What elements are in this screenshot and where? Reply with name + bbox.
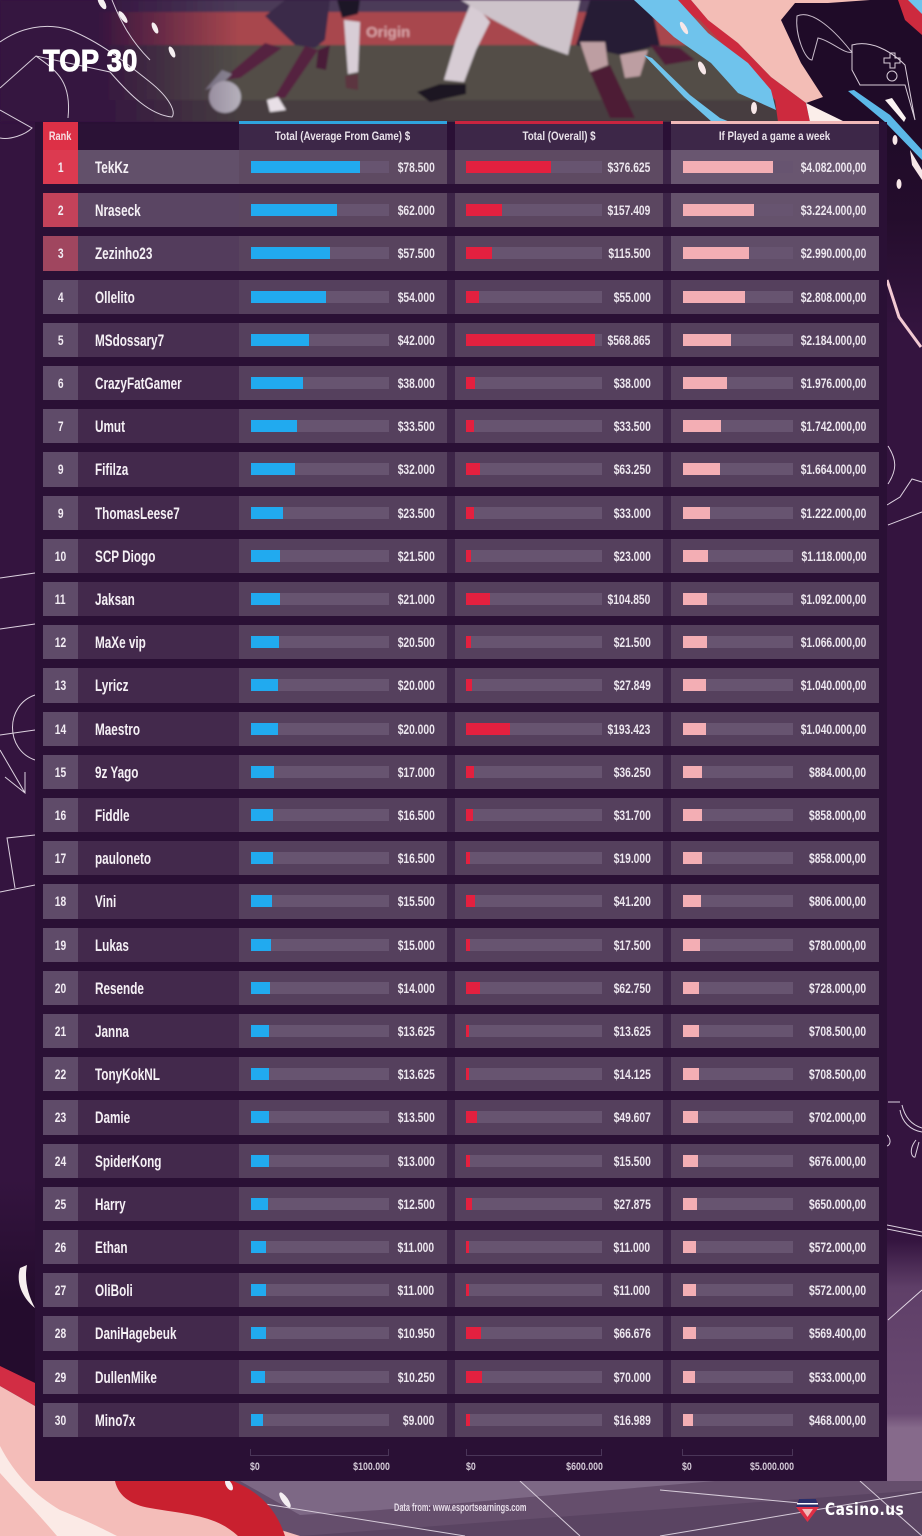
row 22: TonyKokNL	[95, 1065, 160, 1084]
row 12: MaXe vip	[95, 633, 146, 652]
row 6: CrazyFatGamer	[95, 374, 182, 393]
source note: Data from: www.esportsearnings.com	[394, 1502, 526, 1514]
row 20: $62.750	[613, 981, 650, 996]
row 20: $14.000	[397, 981, 434, 996]
row 7: 7	[58, 419, 63, 434]
row 27	[43, 1273, 879, 1307]
row 29: $70.000	[613, 1370, 650, 1385]
row 29: DullenMike	[95, 1368, 157, 1387]
header: total overall: Total (Overall) $	[522, 131, 596, 143]
header: rank	[43, 122, 78, 150]
row 1: TekKz	[95, 158, 129, 177]
row 1	[43, 150, 879, 184]
row 21	[43, 1014, 879, 1048]
row 19: 19	[55, 938, 66, 953]
row 4: $55.000	[613, 290, 650, 305]
row 25: $12.500	[397, 1197, 434, 1212]
row 29: $533.000,00	[809, 1370, 866, 1385]
axis label: $0: $0	[466, 1461, 476, 1473]
row 5	[43, 323, 879, 357]
row 14	[43, 712, 879, 746]
row 17	[43, 841, 879, 875]
row 22: $14.125	[613, 1067, 650, 1082]
row 9: $1.222.000,00	[801, 506, 866, 521]
row 8: 9	[58, 462, 63, 477]
row 19: Lukas	[95, 936, 129, 955]
row 27: $11.000	[398, 1283, 434, 1298]
row 15	[43, 755, 879, 789]
icon: shield	[796, 1499, 819, 1522]
row 5: MSdossary7	[95, 331, 164, 350]
row 10: $1.118.000,00	[801, 549, 866, 564]
row 20: Resende	[95, 979, 144, 998]
row 3: $57.500	[397, 246, 434, 261]
row 5: $568.865	[608, 333, 650, 348]
row 10: 10	[55, 549, 66, 564]
title: TOP 30	[43, 43, 138, 78]
header: played a game a week	[671, 124, 879, 150]
header: total overall	[455, 124, 663, 150]
row 18: $15.500	[397, 894, 434, 909]
row 27: $11.000	[614, 1283, 650, 1298]
row 24: $676.000,00	[809, 1154, 866, 1169]
row 6: 6	[58, 376, 63, 391]
row 19: $17.500	[613, 938, 650, 953]
axis label: $5.000.000: $5.000.000	[750, 1461, 794, 1473]
row 28: $10.950	[397, 1326, 434, 1341]
row 13: $27.849	[613, 678, 650, 693]
row 9: $33.000	[613, 506, 650, 521]
row 13	[43, 668, 879, 703]
row 6: $38.000	[613, 376, 650, 391]
row 23	[43, 1100, 879, 1135]
row 14: $1.040.000,00	[801, 722, 866, 737]
row 11: $21.000	[397, 592, 434, 607]
row 28: $66.676	[613, 1326, 650, 1341]
axis label: $600.000: $600.000	[566, 1461, 603, 1473]
row 18: $806.000,00	[809, 894, 866, 909]
row 24: $15.500	[613, 1154, 650, 1169]
row 26	[43, 1230, 879, 1264]
row 8: $63.250	[613, 462, 650, 477]
row 15: 15	[55, 765, 66, 780]
row 18	[43, 884, 879, 919]
row 10: SCP Diogo	[95, 547, 155, 566]
row 23: $49.607	[613, 1110, 650, 1125]
row 3	[43, 236, 879, 271]
row 1: $376.625	[608, 160, 650, 175]
row 17: pauloneto	[95, 849, 151, 868]
header: played a game a week: If Played a game a week	[719, 131, 831, 143]
row 7: Umut	[95, 417, 125, 436]
row 28: 28	[55, 1326, 66, 1341]
axis: played a game a week	[682, 1449, 793, 1456]
row 7	[43, 409, 879, 443]
row 9: 9	[58, 506, 63, 521]
logo: Casino.us	[796, 1499, 904, 1522]
row 25: Harry	[95, 1195, 126, 1214]
row 2: $62.000	[397, 203, 434, 218]
row 10: $21.500	[397, 549, 434, 564]
row 16: $858.000,00	[809, 808, 866, 823]
row 23: Damie	[95, 1108, 130, 1127]
row 3: $2.990.000,00	[801, 246, 866, 261]
row 9: ThomasLeese7	[95, 504, 180, 523]
row 21: $13.625	[397, 1024, 434, 1039]
row 7: $33.500	[613, 419, 650, 434]
row 17: $858.000,00	[809, 851, 866, 866]
row 3: Zezinho23	[95, 244, 152, 263]
row 4: 4	[58, 290, 63, 305]
axis label: $100.000: $100.000	[353, 1461, 390, 1473]
row 25: $650.000,00	[809, 1197, 866, 1212]
header: name column	[78, 124, 239, 150]
row 11	[43, 582, 879, 616]
row 1: $4.082.000,00	[801, 160, 866, 175]
row 19: $780.000,00	[809, 938, 866, 953]
splash: blue, red and pink shapes top right	[634, 0, 922, 332]
row 17: 17	[55, 851, 66, 866]
row 6: $38.000	[397, 376, 434, 391]
axis label: $0: $0	[250, 1461, 260, 1473]
row 29: 29	[55, 1370, 66, 1385]
row 13: 13	[55, 678, 66, 693]
row 8: $1.664.000,00	[801, 462, 866, 477]
row 29: $10.250	[397, 1370, 434, 1385]
row 30: $16.989	[613, 1413, 650, 1428]
photo: football players at top: Origin	[366, 24, 410, 41]
row 22: $708.500,00	[809, 1067, 866, 1082]
row 8: Fifilza	[95, 460, 128, 479]
row 2: 2	[58, 203, 63, 218]
row 10: $23.000	[613, 549, 650, 564]
row 27: OliBoli	[95, 1281, 133, 1300]
row 22: 22	[55, 1067, 66, 1082]
row 15: $36.250	[613, 765, 650, 780]
row 24: $13.000	[397, 1154, 434, 1169]
row 7: $1.742.000,00	[801, 419, 866, 434]
row 19	[43, 928, 879, 962]
row 20	[43, 971, 879, 1005]
row 15: $884.000,00	[809, 765, 866, 780]
pitch line drawings on left margin	[0, 573, 35, 892]
row 4: Ollelito	[95, 288, 135, 307]
row 18: 18	[55, 894, 66, 909]
row 27: 27	[55, 1283, 66, 1298]
row 10	[43, 539, 879, 573]
row 5: $2.184.000,00	[801, 333, 866, 348]
row 21: Janna	[95, 1022, 129, 1041]
row 18: $41.200	[613, 894, 650, 909]
row 9: $23.500	[397, 506, 434, 521]
row 15: $17.000	[397, 765, 434, 780]
row 30: 30	[55, 1413, 66, 1428]
row 1: $78.500	[397, 160, 434, 175]
row 25: $27.875	[613, 1197, 650, 1212]
row 23: 23	[55, 1110, 66, 1125]
row 2	[43, 193, 879, 227]
row 14: $193.423	[608, 722, 650, 737]
row 21: $708.500,00	[809, 1024, 866, 1039]
row 26: Ethan	[95, 1238, 128, 1257]
row 4	[43, 280, 879, 314]
photo: football players at top	[0, 0, 800, 122]
row 8	[43, 452, 879, 487]
row 19: $15.000	[397, 938, 434, 953]
axis: total overall	[466, 1449, 602, 1456]
row 14: $20.000	[397, 722, 434, 737]
row 14: 14	[55, 722, 66, 737]
pitch photo lower right and bottom	[0, 1240, 922, 1536]
row 5: 5	[58, 333, 63, 348]
row 15: 9z Yago	[95, 763, 138, 782]
outline shapes and drops top left	[0, 0, 177, 138]
header: average from game	[239, 124, 447, 150]
row 14: Maestro	[95, 720, 140, 739]
row 12: 12	[55, 635, 66, 650]
row 23: $702.000,00	[809, 1110, 866, 1125]
row 2: $157.409	[608, 203, 650, 218]
row 22: $13.625	[397, 1067, 434, 1082]
row 3: $115.500	[608, 246, 650, 261]
row 24: 24	[55, 1154, 66, 1169]
row 11: 11	[55, 592, 66, 607]
pink and red shapes lower left	[0, 1180, 300, 1536]
axis label: $0: $0	[682, 1461, 692, 1473]
header: average from game: Total (Average From Game) $	[275, 131, 411, 143]
row 16	[43, 798, 879, 832]
row 11: Jaksan	[95, 590, 135, 609]
row 13: Lyricz	[95, 676, 128, 695]
row 16: $16.500	[397, 808, 434, 823]
row 28	[43, 1316, 879, 1351]
row 2: Nraseck	[95, 201, 141, 220]
row 24: SpiderKong	[95, 1152, 161, 1171]
curve, ball and boots on right margin	[887, 280, 922, 1236]
row 28: DaniHagebeuk	[95, 1324, 176, 1343]
row 30: $9.000	[403, 1413, 434, 1428]
row 1: 1	[58, 160, 63, 175]
row 18: Vini	[95, 892, 116, 911]
row 4: $2.808.000,00	[801, 290, 866, 305]
row 16: Fiddle	[95, 806, 130, 825]
axis: average from game	[250, 1449, 389, 1456]
row 9	[43, 496, 879, 530]
row 7: $33.500	[397, 419, 434, 434]
row 30: $468.000,00	[809, 1413, 866, 1428]
row 26: $572.000,00	[809, 1240, 866, 1255]
row 2: $3.224.000,00	[801, 203, 866, 218]
row 21: 21	[55, 1024, 66, 1039]
row 27: $572.000,00	[809, 1283, 866, 1298]
row 4: $54.000	[397, 290, 434, 305]
row 21: $13.625	[613, 1024, 650, 1039]
row 16: 16	[55, 808, 66, 823]
row 12: $20.500	[397, 635, 434, 650]
row 12: $1.066.000,00	[801, 635, 866, 650]
row 3: 3	[58, 246, 63, 261]
row 26: $11.000	[398, 1240, 434, 1255]
row 16: $31.700	[613, 808, 650, 823]
row 20: 20	[55, 981, 66, 996]
row 12	[43, 625, 879, 659]
row 30	[43, 1403, 879, 1437]
row 29	[43, 1360, 879, 1394]
row 8: $32.000	[397, 462, 434, 477]
row 23: $13.500	[397, 1110, 434, 1125]
row 11: $104.850	[608, 592, 650, 607]
row 30: Mino7x	[95, 1411, 135, 1430]
row 11: $1.092.000,00	[801, 592, 866, 607]
row 13: $20.000	[397, 678, 434, 693]
row 6	[43, 366, 879, 400]
row 25: 25	[55, 1197, 66, 1212]
logo: Casino.us: Casino.us	[825, 1500, 904, 1520]
row 24	[43, 1144, 879, 1178]
row 20: $728.000,00	[809, 981, 866, 996]
row 28: $569.400,00	[809, 1326, 866, 1341]
row 6: $1.976.000,00	[801, 376, 866, 391]
header: rank: Rank	[49, 131, 72, 143]
row 22	[43, 1057, 879, 1091]
row 26: 26	[55, 1240, 66, 1255]
row 17: $19.000	[613, 851, 650, 866]
row 5: $42.000	[397, 333, 434, 348]
row 25	[43, 1187, 879, 1221]
row 26: $11.000	[614, 1240, 650, 1255]
row 13: $1.040.000,00	[801, 678, 866, 693]
row 17: $16.500	[397, 851, 434, 866]
row 12: $21.500	[613, 635, 650, 650]
